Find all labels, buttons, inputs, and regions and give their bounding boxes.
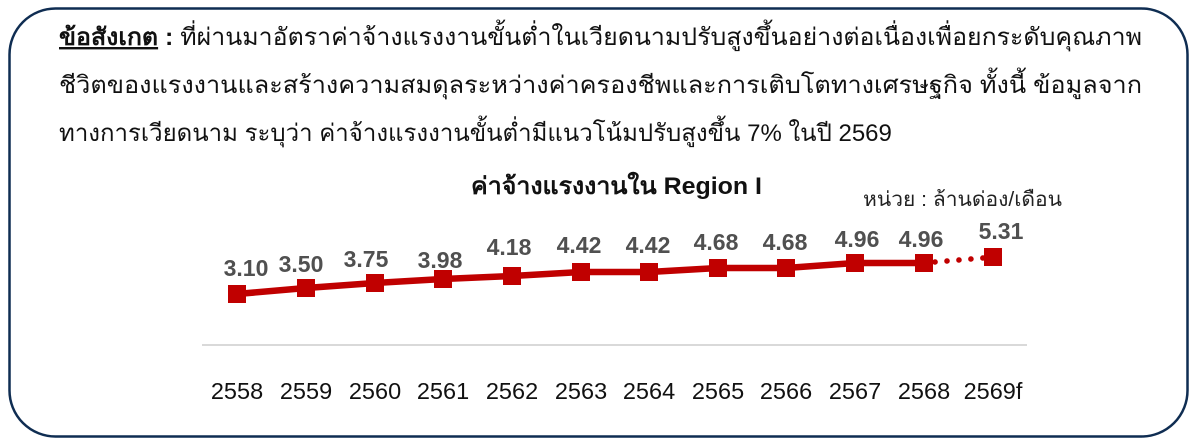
year axis labels: 2564 xyxy=(623,378,675,404)
data value labels: 4.18 xyxy=(487,234,532,260)
year axis labels: 2567 xyxy=(829,378,881,404)
data value labels: 4.42 xyxy=(557,232,601,258)
year axis labels: 2569f xyxy=(964,378,1023,404)
line 2: ชีวิตของแรงงานและสร้างความสมดุลระหว่างค่าครองชีพและการเติบโตทางเศรษฐกิจ ทั้งนี้ ข้อมูลจาก xyxy=(59,67,1142,100)
observation text block xyxy=(59,19,1142,148)
year axis labels: 2563 xyxy=(555,378,607,404)
year axis labels: 2560 xyxy=(349,378,401,404)
chart title: ค่าจ้างแรงงานใน Region I xyxy=(471,171,762,200)
data value labels xyxy=(224,218,1024,281)
data value labels: 5.31 xyxy=(979,218,1024,244)
data value labels: 4.68 xyxy=(763,229,808,255)
year axis labels: 2568 xyxy=(898,378,950,404)
dotted forecast line xyxy=(935,258,983,262)
data value labels: 4.42 xyxy=(626,232,670,258)
data value labels: 3.75 xyxy=(344,246,389,272)
solid wage line xyxy=(237,263,924,294)
line chart xyxy=(202,218,1027,404)
data value labels: 4.96 xyxy=(835,226,879,252)
year axis labels: 2566 xyxy=(760,378,812,404)
data value labels: 3.98 xyxy=(418,247,463,273)
year axis labels: 2559 xyxy=(280,378,332,404)
year axis labels: 2561 xyxy=(417,378,469,404)
year axis labels xyxy=(211,378,1023,404)
data value labels: 3.50 xyxy=(279,251,323,277)
data value labels: 4.68 xyxy=(694,229,739,255)
unit label: หน่วย : ล้านด่อง/เดือน xyxy=(863,188,1062,211)
year axis labels: 2565 xyxy=(692,378,744,404)
line 3: ทางการเวียดนาม ระบุว่า ค่าจ้างแรงงานขั้นต่ำมีแนวโน้มปรับสูงขึ้น 7% ในปี 2569 xyxy=(59,115,892,148)
year axis labels: 2558 xyxy=(211,378,263,404)
axis baseline xyxy=(202,344,1027,346)
year axis labels: 2562 xyxy=(486,378,538,404)
data point markers xyxy=(228,248,1002,303)
data value labels: 3.10 xyxy=(224,255,268,281)
data value labels: 4.96 xyxy=(899,226,943,252)
line 1: ข้อสังเกต : ที่ผ่านมาอัตราค่าจ้างแรงงานขั้นต่ำในเวียดนามปรับสูงขึ้นอย่างต่อเนื่องเพื่อยกระดับคุณภาพ xyxy=(59,19,1142,52)
